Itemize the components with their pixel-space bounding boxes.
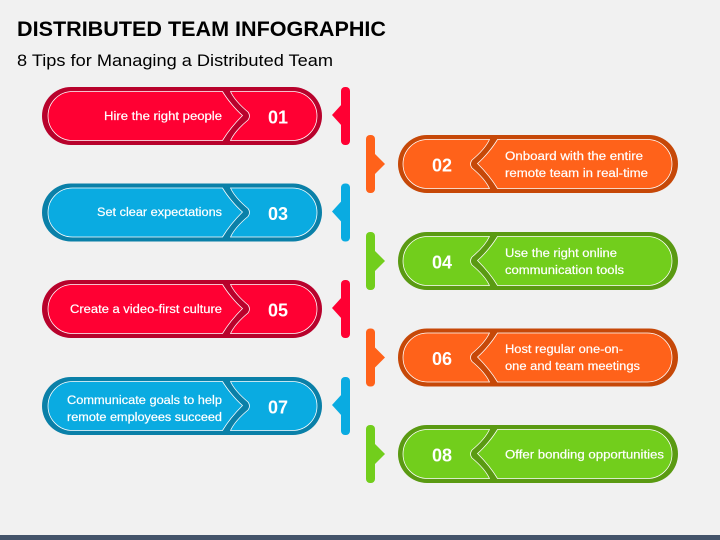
marker 08 (366, 425, 385, 483)
subtitle: 8 Tips for Managing a Distributed Team (17, 51, 333, 70)
number 08: 08 (432, 446, 452, 466)
number 03: 03 (268, 204, 288, 224)
marker 04 (366, 232, 385, 290)
marker 07 (332, 377, 350, 435)
tip 02 (366, 135, 678, 193)
number 01: 01 (268, 108, 288, 128)
tip 04 (366, 232, 678, 290)
tip 01 (42, 87, 350, 145)
text 05: Create a video-first culture (70, 304, 222, 316)
pill 07 (42, 377, 322, 435)
tip 06 (366, 328, 678, 386)
footer bar (0, 535, 720, 540)
number 07: 07 (268, 398, 288, 418)
tip 07 (42, 377, 350, 435)
title: DISTRIBUTED TEAM INFOGRAPHIC (17, 18, 386, 41)
pill 05 (42, 280, 322, 338)
text 04: communication tools (505, 265, 624, 277)
number 06: 06 (432, 349, 452, 369)
marker 03 (332, 184, 350, 242)
pill 04 (398, 232, 678, 290)
number 02: 02 (432, 156, 452, 176)
tip 03 (42, 184, 350, 242)
pill 01 (42, 87, 322, 145)
text 08: Offer bonding opportunities (505, 450, 664, 462)
text 02: Onboard with the entire (505, 151, 643, 163)
tip 05 (42, 280, 350, 338)
number 05: 05 (268, 300, 288, 320)
pill 06 (398, 328, 678, 386)
pill 08 (398, 425, 678, 483)
text 04: Use the right online (505, 248, 617, 260)
pill 03 (42, 184, 322, 242)
text 03: Set clear expectations (97, 207, 222, 219)
tip 08 (366, 425, 678, 483)
marker 06 (366, 328, 385, 386)
text 06: Host regular one-on- (505, 344, 623, 356)
text 02: remote team in real-time (505, 168, 648, 180)
number 04: 04 (432, 252, 452, 272)
text 01: Hire the right people (104, 111, 222, 123)
text 06: one and team meetings (505, 361, 640, 373)
pill 02 (398, 135, 678, 193)
marker 01 (332, 87, 350, 145)
text 07: remote employees succeed (67, 412, 222, 424)
text 07: Communicate goals to help (67, 395, 222, 407)
marker 02 (366, 135, 385, 193)
marker 05 (332, 280, 350, 338)
